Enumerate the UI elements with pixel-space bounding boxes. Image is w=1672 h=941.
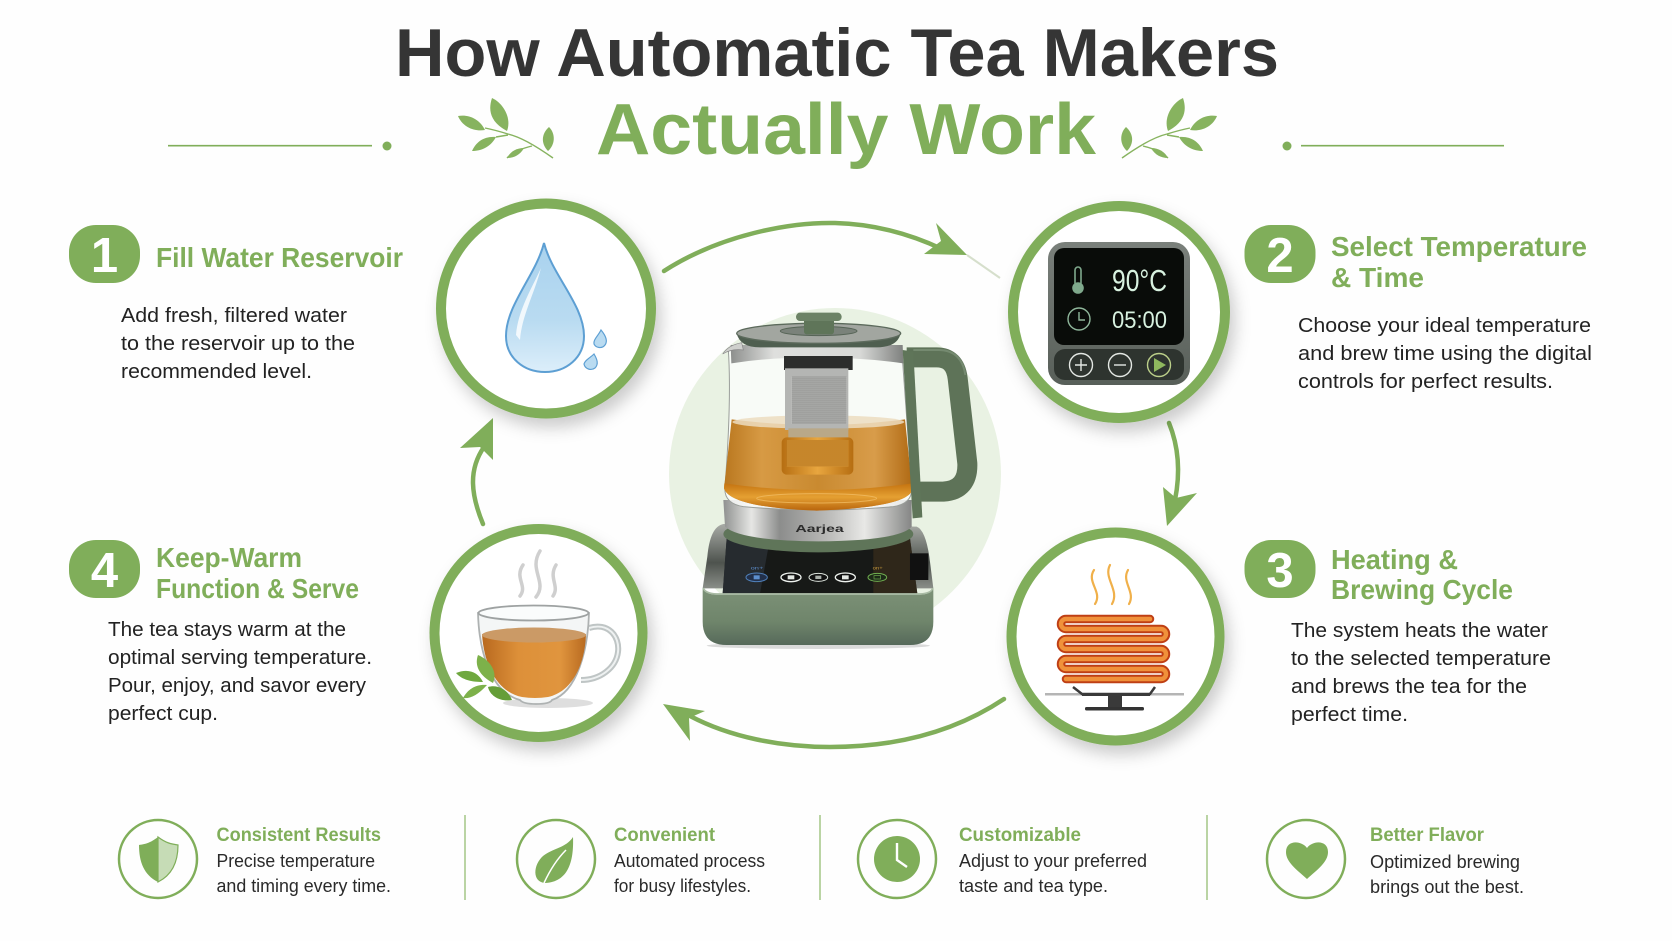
icon: control panel	[1048, 242, 1190, 385]
arrow: step 2 to step 3	[1163, 423, 1197, 526]
coil stand	[1045, 687, 1184, 710]
divider	[1206, 815, 1208, 900]
step 2 description: Choose your ideal temperature	[1298, 315, 1591, 337]
step 4 badge	[69, 540, 140, 598]
step 4 description: optimal serving temperature.	[108, 647, 372, 669]
icon: right tea sprig	[1121, 98, 1217, 158]
step 3 badge	[1244, 540, 1316, 598]
step 1 description	[121, 305, 355, 383]
illustration: tea kettle	[703, 313, 967, 649]
title	[395, 15, 1279, 170]
touch buttons: on+	[751, 565, 764, 570]
arrow: step 4 to step 1	[460, 418, 493, 524]
step 1 badge: 1	[91, 229, 118, 283]
benefit: consistent results	[119, 820, 391, 898]
step 1 badge	[69, 225, 140, 283]
step 4 circle: tea cup	[434, 529, 642, 737]
step 4 description: The tea stays warm at the	[108, 619, 346, 641]
step 1 description: to the reservoir up to the	[121, 333, 355, 355]
better flavor text: Optimized brewing	[1370, 852, 1520, 872]
mint leaves	[456, 655, 512, 700]
infuser	[782, 356, 853, 475]
step 2 description: controls for perfect results.	[1298, 371, 1553, 393]
consistent results text	[216, 825, 391, 896]
kettle collar	[731, 345, 903, 363]
step 3 heading	[1331, 544, 1513, 605]
cup handle	[581, 627, 618, 680]
step 3 heading: Heating &	[1331, 544, 1458, 575]
consistent results text: and timing every time.	[216, 876, 391, 896]
step 4 text	[69, 540, 372, 725]
step 4 description	[108, 619, 372, 725]
divider	[819, 815, 821, 900]
step 2 circle: digital control panel	[1013, 206, 1225, 418]
tea liquid	[724, 415, 912, 511]
temperature readout: 90°C	[1112, 263, 1167, 298]
touch buttons: on+	[873, 565, 883, 570]
plus button	[1070, 354, 1092, 376]
left title ornament line	[168, 142, 392, 150]
step 2 badge: 2	[1266, 229, 1294, 283]
kettle lid	[737, 313, 901, 347]
icon: water drop	[506, 243, 606, 372]
orange steam	[1092, 565, 1131, 604]
right title ornament line	[1282, 142, 1504, 150]
step 2 badge	[1244, 225, 1316, 283]
minus button	[1108, 354, 1132, 376]
step 2 description	[1298, 315, 1592, 393]
icon: clock	[858, 820, 936, 898]
icon: heating coil	[1045, 565, 1184, 710]
benefit: better flavor	[1267, 820, 1524, 898]
customizable text: Customizable	[959, 825, 1081, 846]
kettle handle	[907, 350, 967, 492]
step 4 description: perfect cup.	[108, 703, 218, 725]
icon: shield	[119, 820, 197, 898]
customizable text	[959, 825, 1147, 896]
cup glass	[478, 613, 589, 704]
benefit: convenient	[517, 820, 765, 898]
step 4 badge: 4	[91, 544, 118, 598]
step 1 description: Add fresh, filtered water	[121, 305, 347, 327]
step 1 circle: water drop	[441, 204, 651, 414]
pale circle behind kettle	[669, 308, 1001, 640]
kettle foot	[723, 516, 913, 552]
consistent results text: Precise temperature	[216, 851, 375, 871]
step 1 heading: Fill Water Reservoir	[156, 242, 403, 273]
better flavor text	[1370, 825, 1524, 897]
icon: leaf	[517, 820, 595, 898]
step 4 heading: Function & Serve	[156, 573, 359, 604]
step 3 description: perfect time.	[1291, 704, 1408, 726]
step 1 description: recommended level.	[121, 361, 312, 383]
step 3 circle: heating coil	[1012, 532, 1220, 740]
cup tea	[482, 634, 586, 698]
coil tube	[1061, 619, 1166, 679]
step 3 description	[1291, 620, 1551, 726]
convenient text: Automated process	[614, 851, 765, 871]
arrow: step 3 to step 4	[663, 699, 1004, 747]
brand label: Aarjea	[795, 524, 844, 535]
step 3 description: and brews the tea for the	[1291, 676, 1527, 698]
step 3 description: The system heats the water	[1291, 620, 1548, 642]
step 4 description: Pour, enjoy, and savor every	[108, 675, 366, 697]
arrow: step 1 to step 2	[664, 223, 1000, 278]
kettle glass body	[725, 348, 912, 510]
clock glyph	[1068, 308, 1090, 330]
title: Actually Work	[596, 90, 1097, 170]
step 3 heading: Brewing Cycle	[1331, 574, 1513, 605]
benefit: customizable	[858, 820, 1147, 898]
better flavor text: brings out the best.	[1370, 877, 1524, 897]
icon: heart	[1267, 820, 1345, 898]
customizable text: Adjust to your preferred	[959, 851, 1147, 871]
grey steam	[520, 551, 556, 597]
step 1 text	[69, 225, 403, 383]
convenient text: Convenient	[614, 825, 716, 846]
cup shadow	[503, 698, 593, 708]
convenient text	[614, 825, 765, 896]
icon: left tea sprig	[458, 98, 554, 158]
touch buttons	[746, 565, 887, 582]
convenient text: for busy lifestyles.	[614, 876, 751, 896]
play button	[1148, 354, 1170, 376]
kettle steel band	[723, 500, 912, 541]
divider	[464, 815, 466, 900]
step 3 description: to the selected temperature	[1291, 648, 1551, 670]
step 2 heading	[1331, 231, 1587, 293]
step 2 heading: Select Temperature	[1331, 231, 1587, 262]
thermometer glyph	[1073, 267, 1083, 293]
step 4 heading: Keep-Warm	[156, 542, 302, 573]
kettle spout	[723, 343, 743, 354]
icon: tea cup	[456, 551, 618, 708]
consistent results text: Consistent Results	[216, 825, 381, 846]
kettle side strip	[903, 350, 922, 518]
step 2 description: and brew time using the digital	[1298, 343, 1592, 365]
step 2 text	[1244, 225, 1592, 393]
step 2 heading: & Time	[1331, 262, 1424, 293]
kettle base	[703, 524, 933, 649]
step 4 heading	[156, 542, 359, 604]
customizable text: taste and tea type.	[959, 876, 1108, 896]
step 3 text	[1244, 540, 1551, 726]
title: How Automatic Tea Makers	[395, 15, 1279, 91]
step 3 badge: 3	[1266, 544, 1294, 598]
better flavor text: Better Flavor	[1370, 825, 1485, 846]
time readout: 05:00	[1112, 307, 1167, 334]
